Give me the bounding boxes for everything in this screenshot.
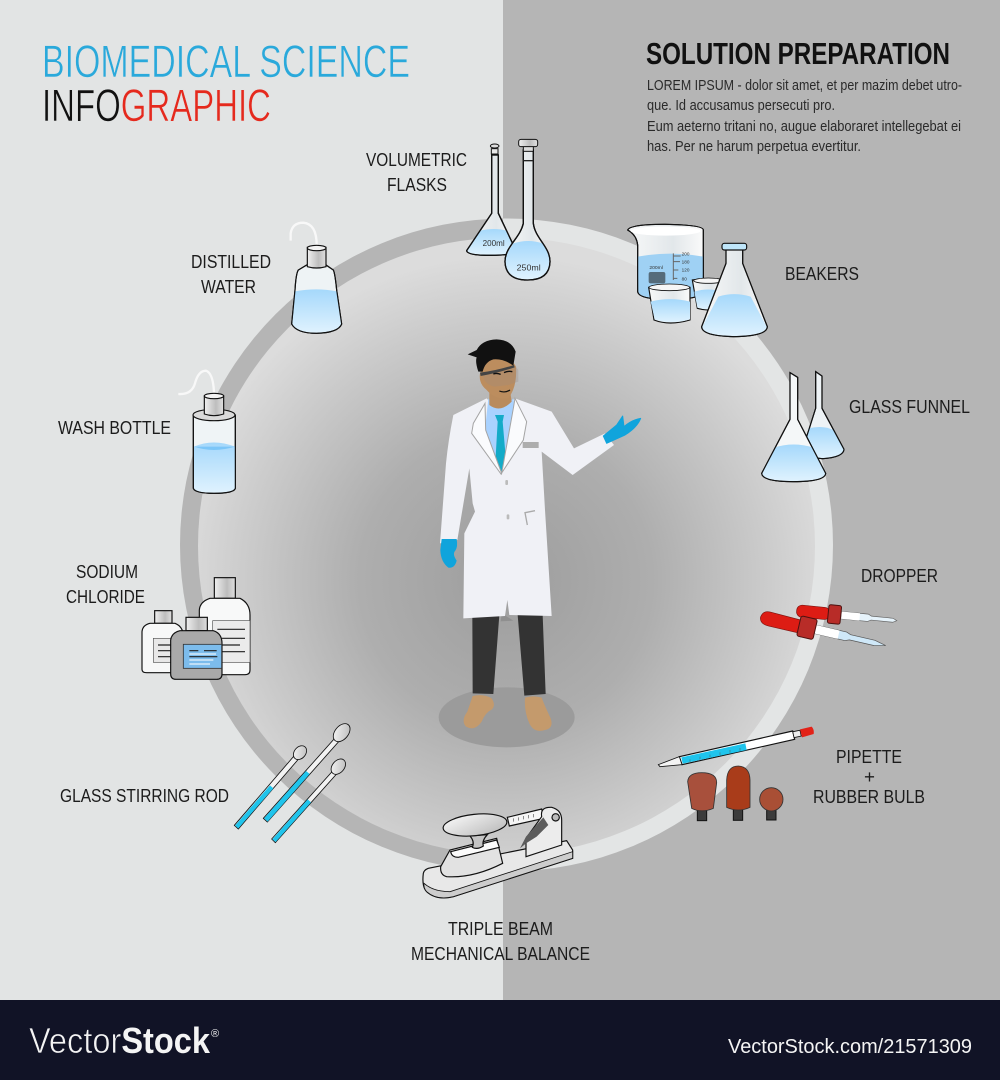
title (42, 36, 410, 131)
label: pipette and rubber bulb: + (864, 766, 875, 787)
label: wash bottle: WASH BOTTLE (58, 417, 171, 438)
background: left panel (0, 0, 503, 1000)
footer logo: VectorStock: VectorStock (29, 1020, 211, 1061)
icon: beakers (628, 224, 767, 337)
footer logo: VectorStock: ® (211, 1028, 219, 1040)
icon: beakers: 80 (682, 276, 687, 281)
label: distilled water: DISTILLED (191, 251, 271, 272)
icon: glass funnels (762, 372, 844, 482)
icon: volumetric flasks: 200ml (483, 239, 505, 248)
label: volumetric flasks: FLASKS (387, 174, 447, 195)
figure: scientist in lab coat (439, 339, 641, 747)
trousers (472, 615, 546, 696)
icon: wash bottle (178, 371, 235, 493)
icon: pipette (658, 727, 814, 767)
gloves (440, 539, 457, 568)
label: sodium chloride: SODIUM (76, 561, 138, 582)
label: pipette and rubber bulb: RUBBER BULB (813, 786, 925, 807)
icon: beakers: 120 (682, 268, 690, 273)
neck and face (489, 388, 512, 408)
shirt and tie (485, 398, 515, 473)
title: BIOMEDICAL SCIENCE (42, 36, 410, 87)
footer image id: VectorStock.com/21571309 (728, 1036, 972, 1058)
floor shadow (439, 687, 575, 747)
label: pipette and rubber bulb (813, 746, 925, 807)
label: volumetric flasks: VOLUMETRIC (366, 149, 467, 170)
background: right panel (503, 0, 1000, 1000)
label: glass funnel: GLASS FUNNEL (849, 396, 970, 417)
coat lapels (472, 398, 527, 474)
icon: glass stirring rods (234, 720, 353, 843)
icon: beakers: 200 (682, 251, 690, 256)
central circle (180, 218, 833, 872)
label: dropper: DROPPER (861, 565, 938, 586)
label: volumetric flasks (366, 149, 467, 195)
icon: volumetric flasks (467, 139, 550, 280)
lab coat (440, 398, 614, 618)
label: glass stirring rod: GLASS STIRRING ROD (60, 785, 229, 806)
label: pipette and rubber bulb: PIPETTE (836, 746, 902, 767)
label: beakers: BEAKERS (785, 263, 859, 284)
text block: description: has. Per ne harum perpetua evertitur. (647, 138, 861, 155)
label: triple beam mechanical balance: MECHANICAL BALANCE (411, 943, 590, 964)
label: distilled water: WATER (201, 276, 256, 297)
footer bar (0, 1000, 1000, 1080)
shoes (464, 695, 552, 731)
title: INFOGRAPHIC (42, 80, 271, 131)
icon: beakers: 180 (682, 259, 690, 264)
text block: description: que. Id accusamus persecuti pro. (647, 97, 835, 114)
label: triple beam mechanical balance: TRIPLE BEAM (448, 918, 553, 939)
hair (468, 339, 516, 372)
label: sodium chloride: CHLORIDE (66, 586, 145, 607)
icon: triple beam balance (423, 807, 573, 898)
text block: description (647, 77, 962, 155)
icon: beakers: 200ml (649, 265, 663, 271)
safety goggles (480, 366, 518, 387)
label: distilled water (191, 251, 271, 297)
icon: rubber bulbs (688, 766, 783, 821)
icon: sodium chloride bottles (142, 578, 250, 679)
label: sodium chloride (66, 561, 145, 607)
icon: droppers (758, 601, 898, 656)
label: triple beam mechanical balance (411, 918, 590, 964)
icon: volumetric flasks: 250ml (517, 263, 541, 273)
icon: distilled water bottle (291, 223, 342, 333)
